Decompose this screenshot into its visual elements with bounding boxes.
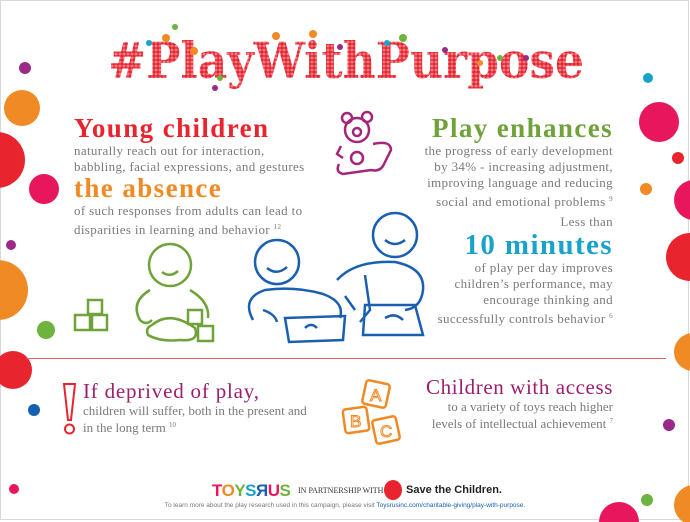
- text: 10 minutes: [438, 214, 613, 326]
- icon: abc blocks: C: [380, 422, 392, 441]
- text: young children: Young children: [74, 113, 269, 143]
- text: children with access: to a variety of toys reach higher: [448, 399, 613, 414]
- text: children with access: Children with access: [426, 375, 613, 399]
- text: children with access: [426, 375, 613, 431]
- text: 10 minutes: Less than: [560, 214, 613, 229]
- text: the absence: [74, 173, 302, 237]
- icon: abc blocks: B: [350, 412, 361, 431]
- text: young children: babbling, facial expressions, and gestures: [74, 159, 305, 174]
- icon: exclamation: [62, 383, 76, 434]
- text: play enhances: social and emotional problems 9: [436, 194, 613, 209]
- logo: toys r us: TOYSЯUS: [212, 481, 290, 500]
- text: young children: naturally reach out for interaction,: [74, 143, 265, 158]
- text: the absence: disparities in learning and behavior 12: [74, 222, 281, 237]
- illustration: children with puzzle: [248, 212, 425, 344]
- text: 10 minutes: of play per day improves: [475, 260, 613, 275]
- footer text: To learn more about the play research used in this campaign, please visit Toysrusinc.com/charitable-giving/play-with-purpose.: [165, 502, 525, 509]
- icon: teddy bear: [335, 110, 392, 176]
- text: play enhances: by 34% - increasing adjustment,: [434, 159, 613, 174]
- text: if deprived of play: in the long term 10: [83, 420, 176, 435]
- illustration: child with blocks: [74, 242, 214, 342]
- text: play enhances: improving language and reducing: [427, 175, 613, 190]
- text: 10 minutes: successfully controls behavior 6: [438, 311, 613, 326]
- text: 10 minutes: children’s performance, may: [454, 276, 613, 291]
- text: in partnership: IN PARTNERSHIP WITH: [298, 486, 383, 495]
- text: young children: [74, 113, 305, 174]
- text: if deprived of play: children will suffer, both in the present and: [83, 403, 307, 418]
- text: the absence: of such responses from adults can lead to: [74, 203, 302, 218]
- text: if deprived of play: [83, 379, 307, 435]
- icon: abc blocks: A: [370, 386, 382, 405]
- divider line: [26, 358, 666, 359]
- text: the absence: the absence: [74, 173, 222, 203]
- logo: save the children: Save the Children.: [406, 484, 502, 496]
- text: play enhances: the progress of early development: [425, 143, 613, 158]
- logo: save the children: [384, 480, 502, 500]
- footer logos: [212, 480, 502, 500]
- icon: abc blocks: [342, 379, 401, 445]
- text: play enhances: [424, 113, 613, 209]
- text: if deprived of play: If deprived of play,: [83, 379, 260, 403]
- text: 10 minutes: encourage thinking and: [483, 292, 613, 307]
- text: play enhances: Play enhances: [432, 113, 613, 143]
- text: children with access: levels of intellectual achievement 7: [432, 416, 613, 431]
- text: 10 minutes: 10 minutes: [464, 229, 613, 261]
